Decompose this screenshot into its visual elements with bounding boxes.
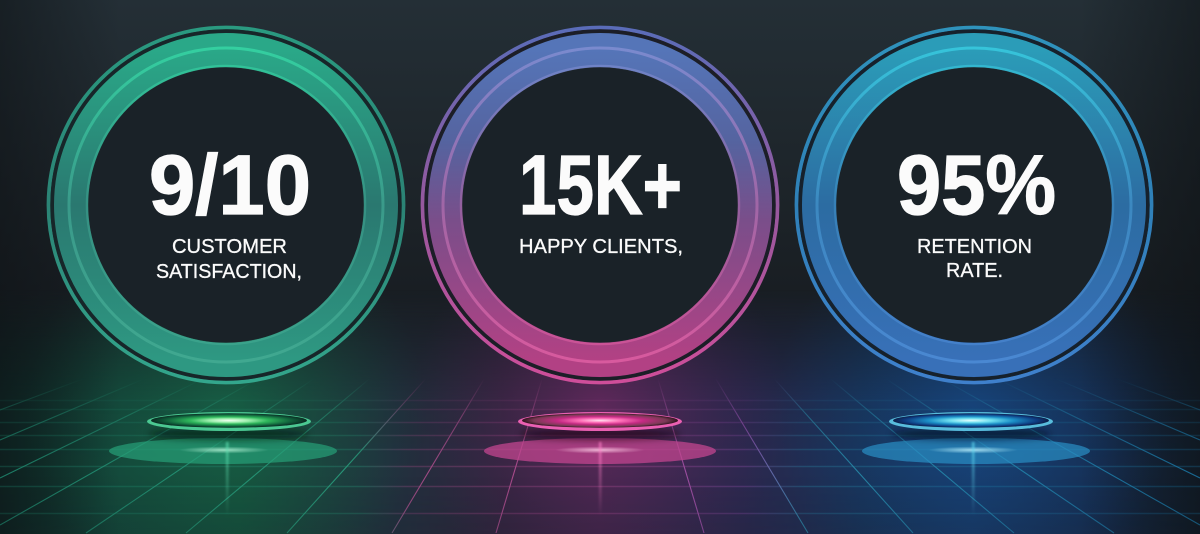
pedestal: blue [862,412,1090,516]
pedestal: green [109,412,337,516]
label: retention rate: RATE. [946,260,1003,282]
label: retention rate [917,236,1032,282]
label: customer satisfaction: CUSTOMER [172,236,287,258]
pedestal: pink [484,412,716,516]
ring: purple to pink [422,28,778,382]
label: happy clients: HAPPY CLIENTS, [519,236,683,258]
panel: customer satisfaction [48,28,404,382]
label: customer satisfaction [156,236,302,283]
label: retention rate: RETENTION [917,236,1032,258]
value: 95%: 95% [897,138,1056,232]
value: 15K+: 15K+ [519,138,682,232]
value: 9/10: 9/10 [149,138,311,232]
ring: blue [796,28,1152,382]
panel: happy clients [422,28,778,382]
perspective floor grid [0,382,1200,534]
label: customer satisfaction: SATISFACTION, [156,261,302,283]
ring: green [48,28,404,382]
panel: retention rate [796,28,1152,382]
